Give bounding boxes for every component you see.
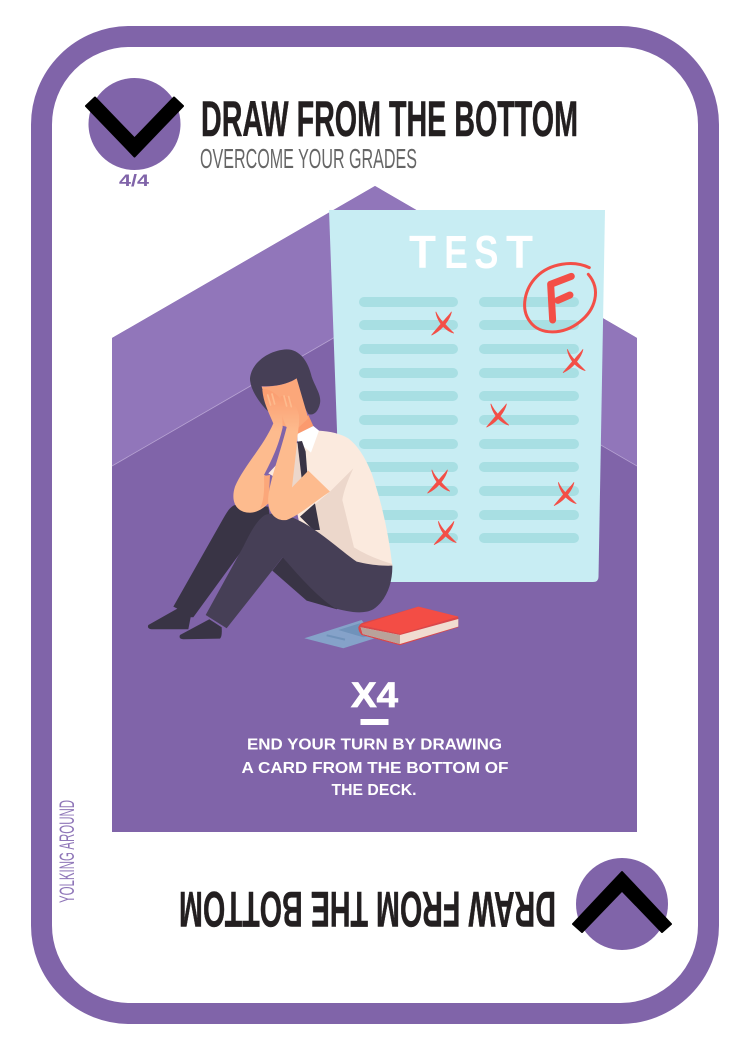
rule text: THE DECK. <box>332 782 416 799</box>
answer lines <box>359 297 579 543</box>
test heading: E <box>444 226 468 278</box>
red x marks <box>428 312 585 545</box>
back hand forearm shade <box>260 475 270 508</box>
test heading: S <box>474 226 498 278</box>
rule text: A CARD FROM THE BOTTOM OF <box>242 760 509 777</box>
test heading <box>409 226 533 278</box>
back leg and foot <box>148 505 270 629</box>
rule text: END YOUR TURN BY DRAWING <box>247 736 502 754</box>
test paper <box>329 210 605 582</box>
test heading: T <box>506 226 533 278</box>
grade F in circle <box>525 264 595 332</box>
dark underside of thigh <box>272 557 353 609</box>
subtitle: OVERCOME YOUR GRADES <box>200 143 417 174</box>
shirt shading below arm <box>307 468 392 570</box>
trousers <box>206 514 392 628</box>
hair <box>250 349 320 414</box>
bottom icon: chevron on circle <box>573 858 671 950</box>
neck <box>295 415 313 434</box>
blue document <box>304 620 375 648</box>
card counter: 4/4 <box>119 171 150 190</box>
lower tie <box>300 503 320 530</box>
tie <box>297 441 307 478</box>
shirt <box>268 431 392 570</box>
rule text <box>242 736 509 799</box>
divider dash <box>360 719 388 725</box>
book and papers <box>304 607 458 648</box>
top icon: chevron on circle <box>86 78 183 170</box>
credit: YOLKING AROUND <box>56 800 79 903</box>
shirt shading at chest <box>287 443 307 487</box>
test heading: T <box>409 226 436 278</box>
multiplier: X4 <box>351 676 399 715</box>
finger lines <box>268 394 291 407</box>
collar <box>297 426 319 453</box>
red book <box>358 607 458 645</box>
face <box>262 378 308 429</box>
back arm and hand <box>233 389 283 513</box>
front arm and hand <box>268 396 330 520</box>
front foot <box>180 619 222 639</box>
panel: purple house backdrop <box>112 186 637 832</box>
illustration: student with head in hands <box>148 349 392 639</box>
